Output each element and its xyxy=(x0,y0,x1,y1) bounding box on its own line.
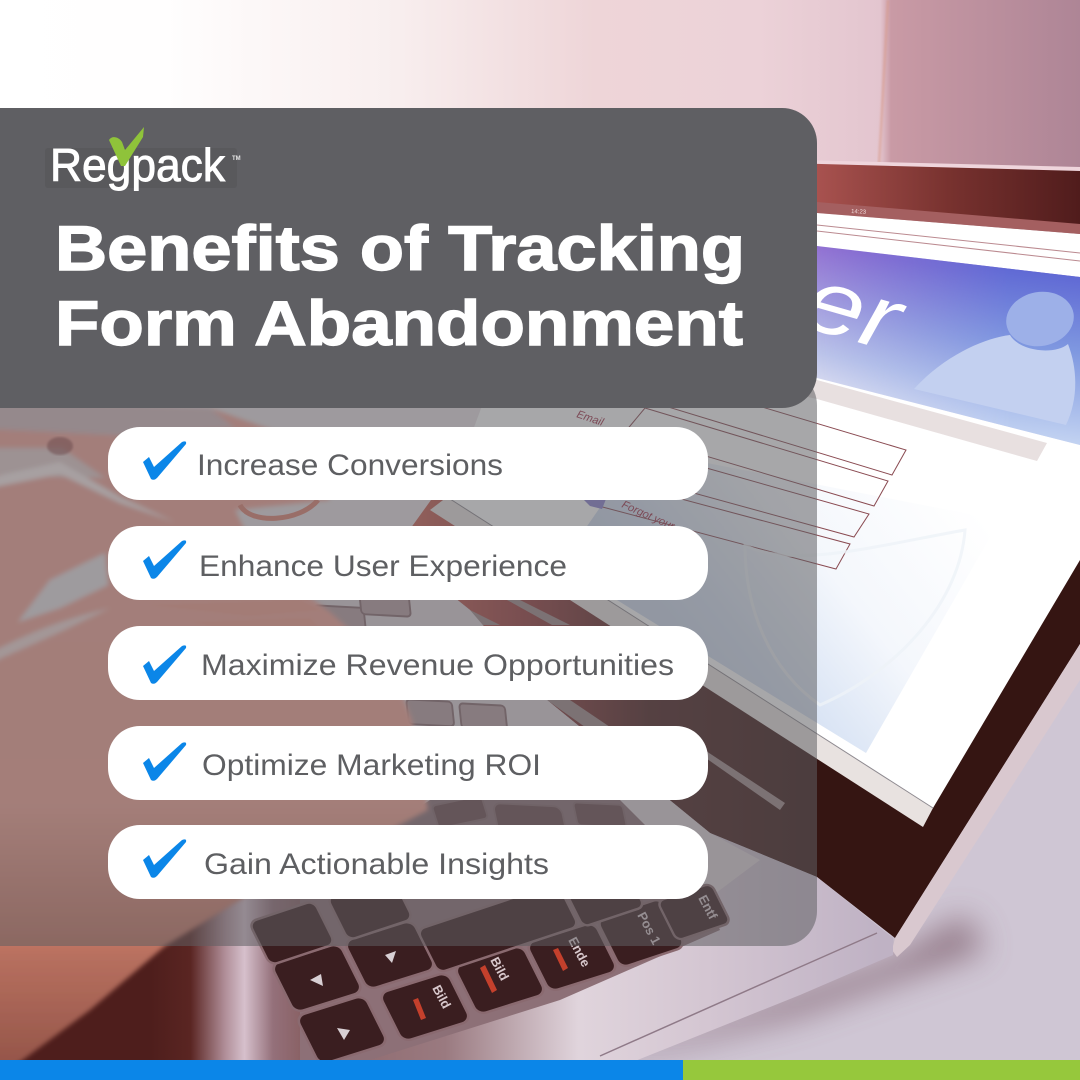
title line 2: Form Abandonment xyxy=(55,289,743,359)
deck front edge line xyxy=(600,933,877,1056)
login labels on screen: Email xyxy=(575,408,605,429)
screen lower hairline xyxy=(447,497,933,808)
key legends: Bild xyxy=(487,954,512,983)
desk shadow xyxy=(560,915,985,1075)
typing hands xyxy=(0,400,428,1080)
item label: Gain Actionable Insights xyxy=(204,848,549,881)
wall behind laptop xyxy=(0,0,1080,300)
watch mark on wrist xyxy=(47,437,73,455)
hinge grey stripes xyxy=(433,600,785,810)
item label: Enhance User Experience xyxy=(199,550,567,583)
header panel xyxy=(0,108,817,408)
bottom color bar xyxy=(0,1060,1080,1080)
tan stripe below header xyxy=(520,320,1047,461)
mid keyboard keys xyxy=(432,795,627,837)
lower translucent panel xyxy=(0,370,817,946)
upper finger band pale xyxy=(0,400,235,436)
list item: Increase Conversions xyxy=(108,427,708,500)
silver streak beside hand xyxy=(150,880,300,1060)
item label: Maximize Revenue Opportunities xyxy=(201,649,674,682)
item label: Increase Conversions xyxy=(197,449,503,482)
dark area left of hand edge xyxy=(0,900,160,1060)
laptop lid top edge xyxy=(640,156,1080,172)
logo check mark xyxy=(109,127,144,166)
shield watermark xyxy=(745,530,965,705)
item label: Optimize Marketing ROI xyxy=(202,749,541,782)
laptop status strip xyxy=(600,188,1080,234)
check icon xyxy=(143,540,186,579)
keyboard keys xyxy=(249,867,731,1065)
logo wordmark: Regpack xyxy=(50,139,226,191)
screen clock text: 14:23 xyxy=(851,209,867,216)
list item: Optimize Marketing ROI xyxy=(108,726,708,800)
upper keyboard keys xyxy=(314,591,507,730)
check icon xyxy=(143,742,186,781)
login labels on screen: Forgot your xyxy=(620,499,677,533)
keyboard hand-side zone xyxy=(250,800,720,1060)
pale blue screen lower area xyxy=(560,450,1000,753)
red key marks xyxy=(413,948,568,1020)
check icon xyxy=(143,645,186,684)
key legends: Pos 1 xyxy=(634,909,664,947)
window frame line xyxy=(878,0,889,165)
pale area behind the panel xyxy=(0,300,560,960)
finger highlight line xyxy=(0,462,175,522)
address bar lines xyxy=(817,225,1080,261)
key arrows xyxy=(310,951,396,1040)
lower finger highlight xyxy=(0,608,110,672)
user avatar on screen xyxy=(914,287,1078,425)
list item: Enhance User Experience xyxy=(108,526,708,600)
blue login button xyxy=(583,499,606,509)
finger streaks over keys xyxy=(150,600,320,628)
logo xyxy=(45,127,241,191)
check icon xyxy=(143,839,186,878)
screen white page xyxy=(447,196,1080,808)
title line 1: Benefits of Tracking xyxy=(55,214,745,284)
form field outlines xyxy=(595,372,906,569)
check icon xyxy=(143,441,186,480)
list item: Maximize Revenue Opportunities xyxy=(108,626,708,700)
screen blue header band xyxy=(545,218,1080,445)
screen silver lower strip xyxy=(430,497,933,827)
login labels on screen xyxy=(575,408,677,533)
screen blue header right tone xyxy=(843,249,1080,445)
key legends: Ende xyxy=(565,934,594,969)
register word on screen: ter xyxy=(764,240,916,372)
key legends xyxy=(429,892,721,1011)
list item: Gain Actionable Insights xyxy=(108,825,708,899)
ring on hand xyxy=(240,500,318,518)
laptop lid band xyxy=(600,158,1080,226)
laptop bezel and hinge band xyxy=(395,240,1080,938)
laptop silver edge xyxy=(892,644,1080,957)
keyboard pale upper zone xyxy=(240,550,760,905)
keyboard between fingers xyxy=(18,553,108,622)
pale gap under first finger xyxy=(0,448,105,478)
key legends: Entf xyxy=(695,892,721,922)
key legends: Bild xyxy=(429,982,454,1011)
keyboard plate xyxy=(240,550,893,1075)
trademark: TM xyxy=(232,156,241,162)
